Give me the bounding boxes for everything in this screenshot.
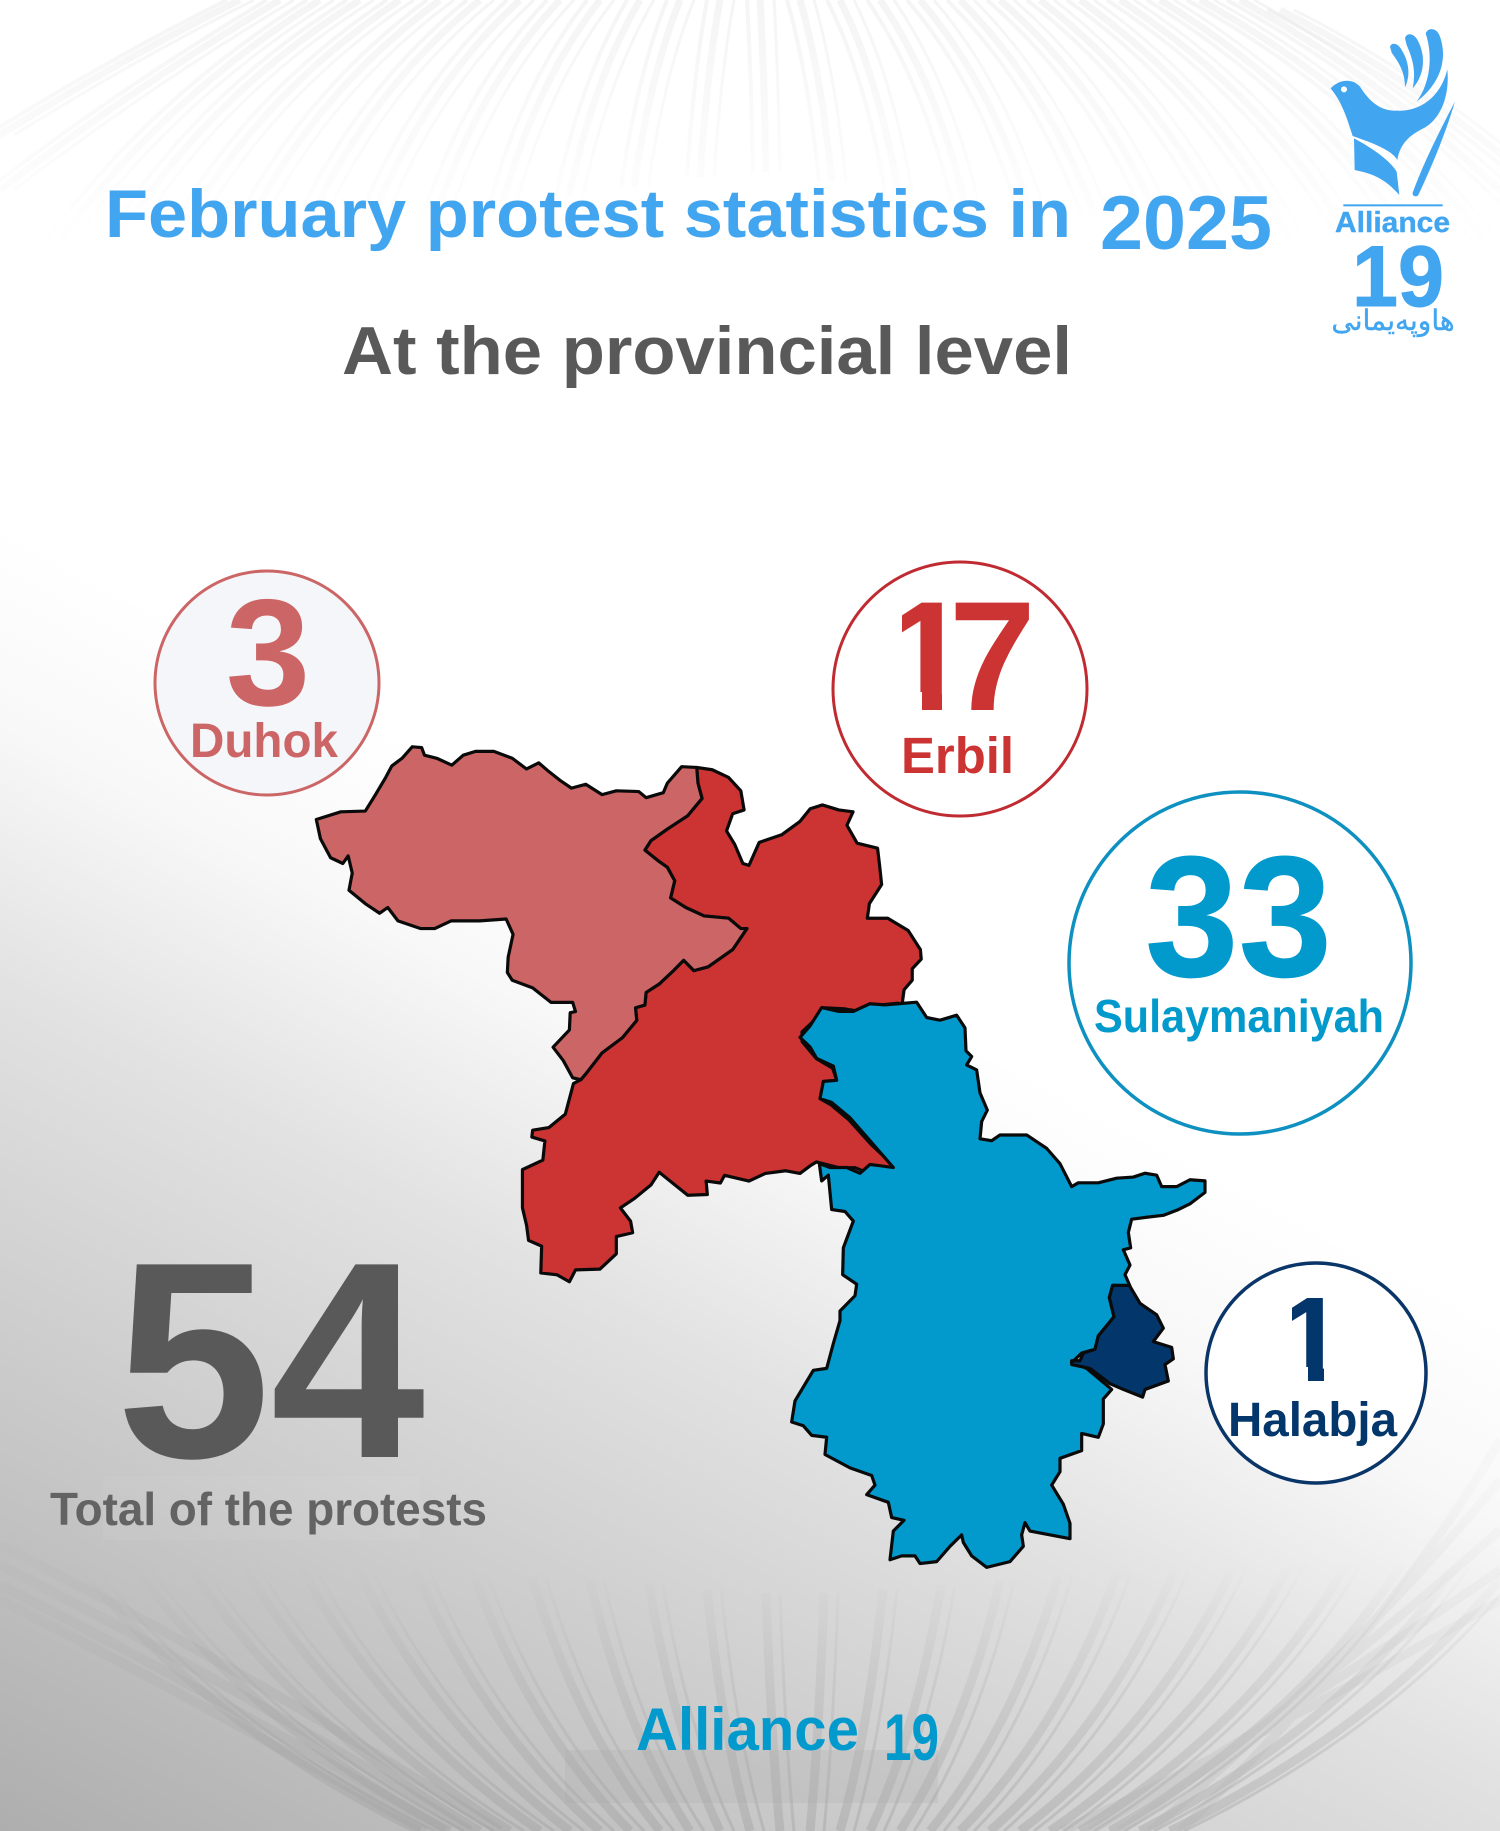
Duhok label: Duhok bbox=[190, 715, 338, 768]
subtitle: At the provincial level bbox=[342, 313, 1072, 389]
callout: Erbil bbox=[833, 562, 1087, 816]
logo number: 19 bbox=[1352, 229, 1444, 325]
title: February protest statistics in bbox=[105, 176, 1071, 252]
footer wordmark bbox=[636, 1696, 939, 1774]
logo Kurdish wordmark: هاوپەیمانی bbox=[1331, 304, 1455, 337]
footer number: 19 bbox=[884, 1700, 939, 1774]
total label: Total of the protests bbox=[50, 1483, 487, 1535]
Duhok value: 3 bbox=[226, 568, 310, 738]
Erbil value bbox=[902, 602, 1029, 710]
footer wordmark: Alliance bbox=[636, 1696, 859, 1763]
Sulaymaniyah label: Sulaymaniyah bbox=[1094, 990, 1384, 1042]
map of provinces bbox=[316, 747, 1205, 1567]
bottom fan rays bbox=[0, 1440, 1500, 1831]
title year: 2025 bbox=[1100, 181, 1272, 266]
logo wordmark: Alliance bbox=[1335, 207, 1450, 239]
callout: Duhok bbox=[155, 568, 379, 795]
Erbil value: 1 bbox=[884, 570, 971, 744]
Erbil value: 7 bbox=[949, 570, 1036, 744]
top light rays bbox=[0, 0, 1500, 267]
Halabja value: 1 bbox=[1278, 1271, 1345, 1407]
Sulaymaniyah value: 33 bbox=[1145, 821, 1332, 1013]
province: Halabja bbox=[1072, 1285, 1173, 1397]
image patch beneath footer bbox=[565, 1750, 938, 1803]
province: Sulaymaniyah bbox=[792, 1002, 1205, 1567]
icon: dove and quill bbox=[1331, 29, 1455, 206]
logo: Alliance 19 bbox=[1331, 29, 1455, 337]
total value: 54 bbox=[116, 1205, 427, 1517]
province: Erbil bbox=[522, 767, 921, 1282]
province: Duhok bbox=[316, 747, 747, 1080]
callout: Sulaymaniyah bbox=[1069, 792, 1411, 1134]
Halabja label: Halabja bbox=[1228, 1394, 1397, 1447]
image patch behind total label bbox=[103, 1476, 420, 1540]
Erbil label: Erbil bbox=[901, 727, 1014, 784]
callout: Halabja bbox=[1206, 1263, 1426, 1483]
